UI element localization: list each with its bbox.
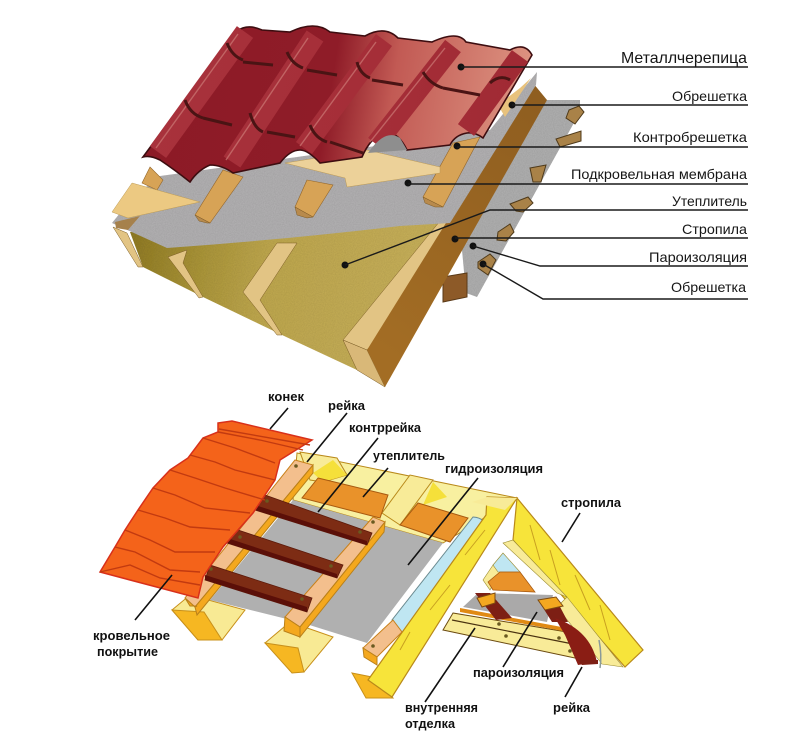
label: кровельное покрытие [93,575,172,659]
labels with leader lines: top diagram [342,50,748,299]
label: Утеплитель [342,193,748,268]
labels with arrows: bottom diagram [93,390,622,731]
label: Подкровельная мембрана: Подкровельная мембрана [571,166,747,182]
battens on the right side [478,106,584,275]
brown battens [205,495,372,612]
upper rafters [300,452,433,525]
illustration: rafter roof layers [100,421,643,698]
label: контррейка [318,421,422,512]
pale cross boards [113,221,470,387]
tile course steps [185,43,510,153]
upper batten strip [498,78,531,117]
label: Металлчерепица: Металлчерепица [621,50,747,67]
label: Подкровельная мембрана [404,166,748,186]
label: Утеплитель: Утеплитель [672,193,747,209]
label: конек [268,390,305,429]
insulation [302,478,468,542]
label: рейка lower [553,667,591,715]
label: контррейка: контррейка [349,421,422,435]
label: рейка lower: рейка [553,701,591,715]
label: утеплитель: утеплитель [373,449,445,463]
label: кровельное покрытие: кровельное [93,629,170,643]
ridge wood deck [293,453,517,543]
block under rafter [443,273,467,302]
label: гидроизоляция: гидроизоляция [445,462,543,476]
insulation [130,220,440,370]
membrane [112,72,537,248]
label: пароизоляция: пароизоляция [473,666,564,680]
label: рейка [307,399,366,462]
batten ends [195,197,443,223]
label: Контробрешетка: Контробрешетка [633,129,747,145]
label: Пароизоляция [470,242,748,266]
left gable rafter [368,497,517,697]
right gable rafter [513,498,643,667]
label: внутренняя отделка: отделка [405,717,456,731]
orange roof covering [100,421,312,598]
label: внутренняя отделка [405,628,478,731]
tile ribs [158,32,520,162]
label: кровельное покрытие: покрытие [97,645,158,659]
label: Стропила: Стропила [682,221,747,237]
label: Пароизоляция: Пароизоляция [649,249,747,265]
label: Металлчерепица [458,50,748,70]
label: пароизоляция [473,612,564,680]
loose wood sheets [285,150,440,187]
counter battens [142,137,480,223]
grey gap under tile wave [368,135,407,153]
tile sheet [143,26,532,182]
salmon counter battens [185,460,402,657]
illustration: metal tile roof layers [112,26,584,387]
label: Обрешетка [508,88,748,108]
label: Стропила [452,221,748,242]
nails [209,464,572,653]
label: рейка: рейка [328,399,366,413]
lower rafter ends [172,595,393,698]
label: Обрешетка: Обрешетка [672,88,747,104]
label: Обрешетка lower [480,260,748,299]
vapour barrier behind rafter [462,100,580,297]
waterproofing membrane [210,500,443,643]
label: Обрешетка lower: Обрешетка [671,279,746,295]
label: стропила: стропила [561,496,622,510]
main rafter [367,83,547,387]
label: конек: конек [268,390,305,404]
label: стропила [561,496,622,542]
label: внутренняя отделка: внутренняя [405,701,478,715]
label: утеплитель [363,449,445,497]
label: Контробрешетка [454,129,748,150]
label: гидроизоляция [408,462,543,565]
blue waterproofing roll [392,517,485,640]
interior of gable [443,540,623,668]
